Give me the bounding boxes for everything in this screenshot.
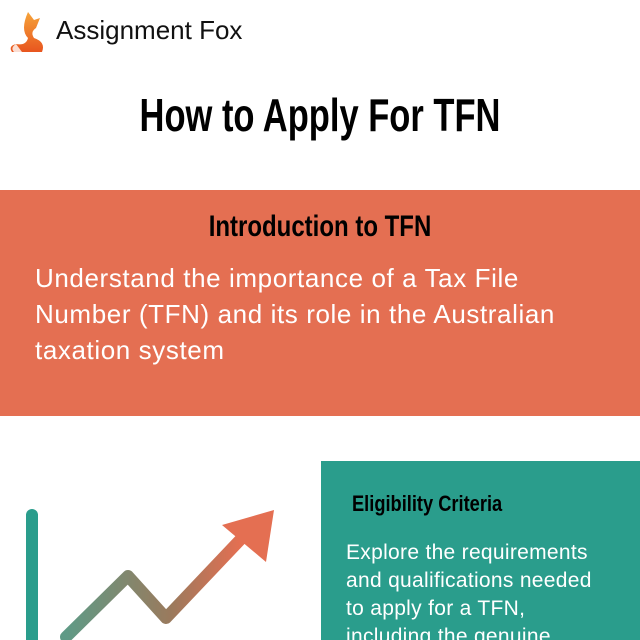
- icon: fox: [10, 12, 43, 52]
- chart: rising arrow: [26, 509, 274, 640]
- text: eligibility: [346, 541, 592, 640]
- title: How to Apply For TFN: [140, 89, 500, 141]
- text: eligibility: to apply for a TFN,: [346, 597, 525, 620]
- brand name: Assignment Fox: [56, 15, 242, 45]
- heading: eligibility: Eligibility Criteria: [352, 491, 502, 516]
- text: introduction: taxation system: [35, 335, 225, 365]
- text: introduction: Number (TFN) and its role in the Australian: [35, 299, 555, 329]
- panel: introduction: [0, 190, 640, 416]
- text: introduction: [35, 263, 555, 365]
- heading: introduction: Introduction to TFN: [209, 210, 431, 243]
- text: eligibility: and qualifications needed: [346, 569, 592, 592]
- text: introduction: Understand the importance of a Tax File: [35, 263, 519, 293]
- panel: eligibility: [321, 461, 640, 640]
- text: eligibility: Explore the requirements: [346, 541, 588, 564]
- logo: [10, 12, 242, 52]
